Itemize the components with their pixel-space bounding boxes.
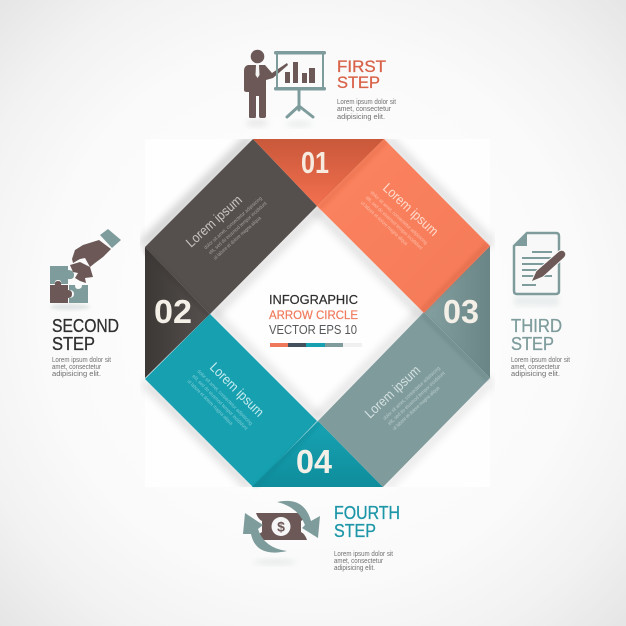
text: second step description: Lorem ipsum dolor sit [52, 357, 111, 364]
icon: money with circular arrows: $ [277, 518, 285, 534]
text: third step description: amet, consectetur [511, 364, 561, 371]
panel: step 02 dark band [145, 139, 317, 378]
label: Lorem ipsum: elit, sed do eiusmod tempor incididunt [191, 374, 249, 432]
text: first step description: Lorem ipsum dolor sit [337, 99, 396, 106]
number 04: 04 [296, 443, 333, 480]
icon: money with circular arrows [243, 501, 320, 565]
center title [269, 292, 362, 347]
text: third step description: adipisicing elit. [511, 371, 560, 378]
text: fourth step description: amet, consectetur [334, 558, 384, 565]
label: Lorem ipsum [186, 355, 267, 437]
label: Lorem ipsum: ut labore et dolore magna aliqua [212, 215, 263, 261]
center title: VECTOR EPS 10 [269, 322, 357, 337]
text: fourth step description: adipisicing elit. [334, 565, 375, 572]
heading: third step: THIRD [511, 316, 562, 336]
panel: step 03 gray band [318, 246, 490, 487]
heading: fourth step: STEP [334, 521, 376, 541]
label: Lorem ipsum: dolor sit amet, consectetur adipisicing [203, 196, 264, 251]
text: first step description: amet, consectetur [337, 106, 392, 113]
label: Lorem ipsum: ut labore et dolore magna aliqua [359, 200, 409, 247]
label: Lorem ipsum: elit, sed do eiusmod tempor incididunt [208, 200, 269, 256]
panel: step 01 orange band [253, 139, 490, 313]
number 01: 01 [301, 145, 329, 180]
central panel [145, 139, 490, 487]
text: third step description [511, 357, 570, 378]
text: fourth step description: Lorem ipsum dolor sit [334, 551, 393, 558]
text: second step description: amet, consectetur [52, 364, 102, 371]
heading: second step: STEP [52, 334, 95, 354]
icon: presenter with chart board [244, 50, 326, 127]
label: Lorem ipsum: dolor sit amet, consectetur adipisicing [196, 369, 254, 427]
heading: second step [52, 316, 119, 354]
text: second step description: adipisicing elit. [52, 371, 101, 378]
center title: INFOGRAPHIC [269, 292, 358, 307]
color bar [270, 343, 362, 347]
icon: document with pen [514, 233, 566, 306]
center title: ARROW CIRCLE [269, 308, 358, 322]
number 03: 03 [443, 293, 479, 330]
number 02: 02 [154, 293, 192, 330]
label: Lorem ipsum: ut labore et dolore magna aliqua [392, 385, 441, 432]
label: Lorem ipsum: ut labore et dolore magna aliqua [186, 379, 234, 427]
label: Lorem ipsum [183, 181, 273, 268]
label: Lorem ipsum: Lorem ipsum [207, 360, 267, 420]
label: Lorem ipsum: elit, sed do eiusmod tempor incididunt [387, 370, 447, 427]
heading: first step: STEP [337, 74, 380, 92]
label: Lorem ipsum: Lorem ipsum [183, 192, 245, 250]
label: Lorem ipsum: dolor sit amet, consectetur adipisicing [369, 190, 429, 246]
panel: step 04 teal band [145, 314, 383, 487]
label: Lorem ipsum: elit, sed do eiusmod tempor incididunt [364, 195, 424, 252]
label: Lorem ipsum: Lorem ipsum [362, 362, 423, 421]
text: second step description [52, 357, 111, 378]
heading: third step: STEP [511, 334, 554, 354]
text: first step description [337, 99, 396, 121]
heading: second step: SECOND [52, 316, 119, 336]
text: fourth step description [334, 551, 393, 572]
heading: third step [511, 316, 562, 354]
panel shadows [141, 135, 494, 490]
label: Lorem ipsum: dolor sit amet, consectetur adipisicing [382, 365, 442, 422]
text: third step description: Lorem ipsum dolor sit [511, 357, 570, 364]
heading: first step [337, 58, 386, 92]
label: Lorem ipsum [359, 176, 442, 257]
icon: hand with puzzle [50, 229, 121, 310]
heading: fourth step [334, 503, 400, 541]
label: Lorem ipsum: Lorem ipsum [380, 180, 441, 239]
text: first step description: adipisicing elit. [337, 114, 385, 121]
label: Lorem ipsum [362, 351, 452, 439]
heading: fourth step: FOURTH [334, 503, 400, 523]
heading: first step: FIRST [337, 58, 386, 76]
